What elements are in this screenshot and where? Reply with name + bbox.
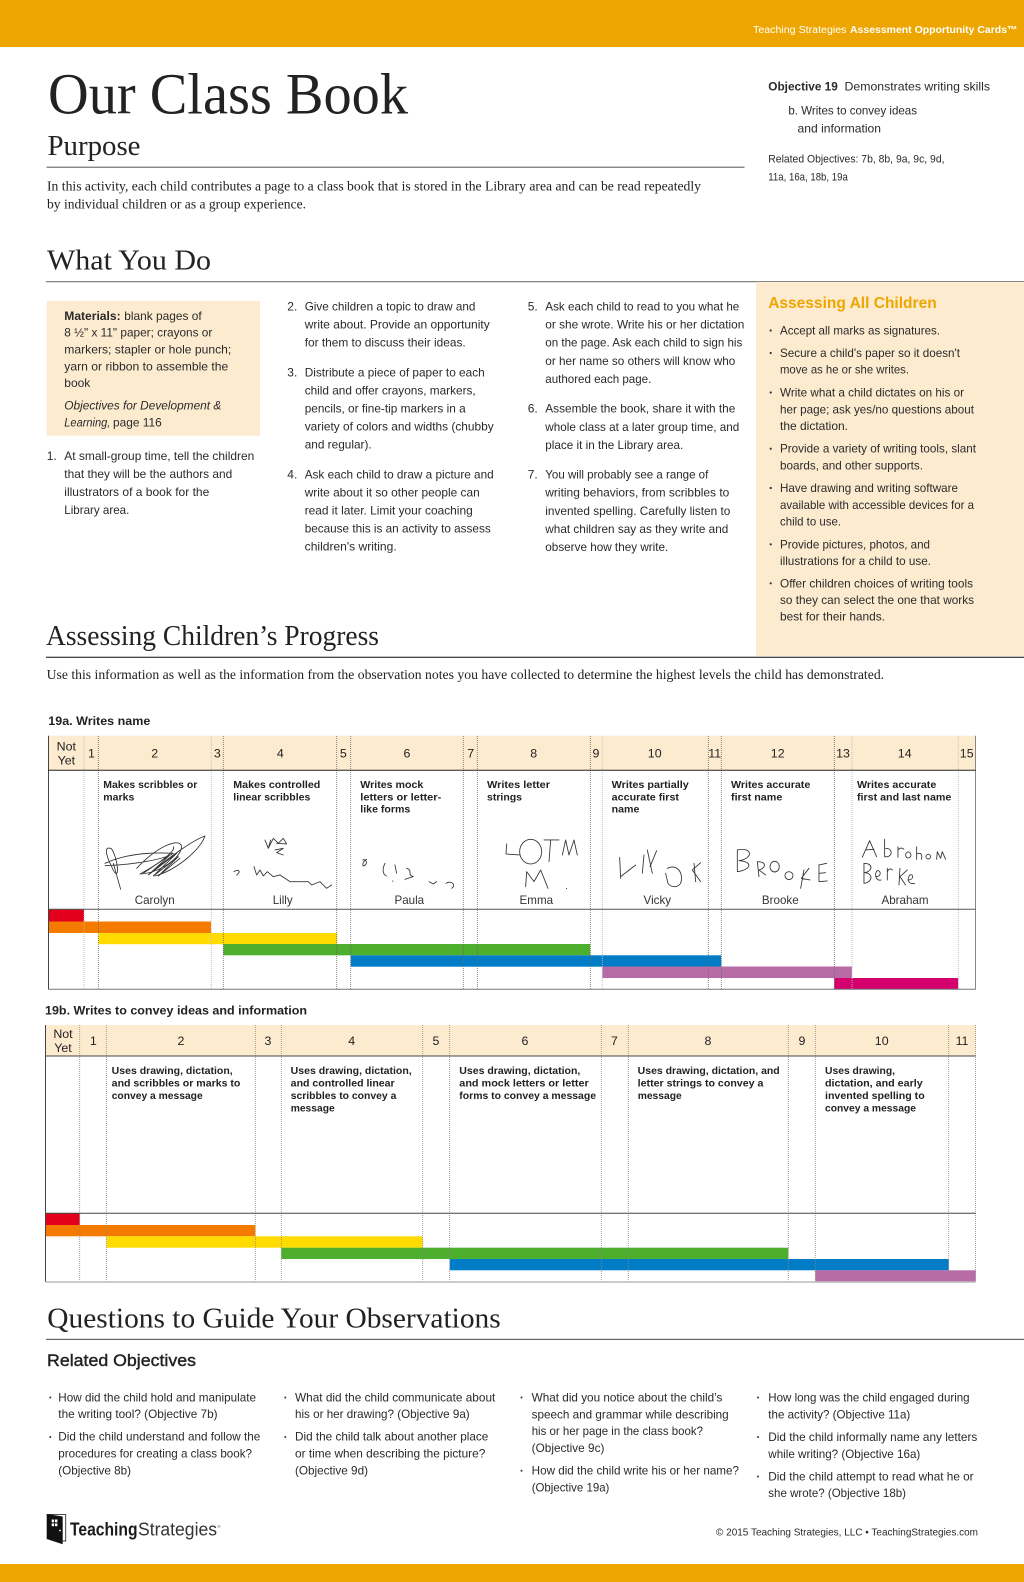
question column 2: his or her drawing? (Objective 9a) — [295, 1408, 470, 1421]
question column 1 — [49, 1391, 260, 1477]
step 7: observe how they write. — [545, 540, 668, 554]
step 2 — [287, 300, 490, 350]
step 2: for them to discuss their ideas. — [305, 336, 466, 350]
question column 4: How long was the child engaged during — [768, 1391, 970, 1404]
panel: assessing all children — [756, 282, 1024, 656]
heading: purpose: Purpose — [48, 130, 140, 162]
panel: assessing all children: Offer children choices of writing tools — [780, 577, 973, 590]
chart title: 19a: 19a. Writes name — [48, 714, 151, 728]
step 1: illustrators of a book for the — [64, 485, 210, 499]
step 5: on the page. Ask each child to sign his — [545, 336, 742, 350]
bottom banner — [0, 1564, 1024, 1582]
heading: assessing children's progress: Assessing Children’s Progress — [46, 620, 379, 652]
level descriptions: Makes controlled — [233, 780, 320, 791]
objective block: Objective 19 — [768, 80, 838, 94]
question column 4 — [757, 1391, 978, 1500]
panel: assessing all children: Assessing All Children — [768, 295, 937, 312]
level descriptions — [103, 780, 952, 816]
chart header row: 13 — [836, 746, 850, 760]
chart header row: 11 — [956, 1034, 969, 1048]
question column 4: Did the child attempt to read what he or — [768, 1470, 974, 1483]
logo: teaching strategies: Teaching — [70, 1519, 138, 1539]
step 5 — [528, 300, 744, 386]
level descriptions: letter strings to convey a — [638, 1079, 764, 1090]
step 5: Ask each child to read to you what he — [545, 300, 740, 314]
chart header row: Yet — [54, 1041, 72, 1055]
level descriptions: marks — [103, 792, 135, 803]
objective block: and information — [798, 122, 881, 136]
step 1: that they will be the authors and — [64, 467, 232, 481]
step 1 — [47, 449, 254, 517]
step 6: place it in the Library area. — [545, 438, 683, 452]
logo: teaching strategies: ® — [218, 1524, 220, 1529]
chart header row: 2 — [178, 1034, 185, 1048]
chart header row: 8 — [705, 1034, 712, 1048]
heading: what you do: What You Do — [47, 244, 211, 276]
child names: Brooke — [762, 894, 799, 907]
step 3: child and offer crayons, markers, — [305, 384, 476, 398]
question column 2: What did the child communicate about — [295, 1391, 496, 1404]
top banner: Assessment Opportunity Cards™ — [850, 25, 1018, 36]
step 4: read it later. Limit your coaching — [305, 504, 473, 518]
step 7: what children say as they write and — [544, 522, 728, 536]
copyright: © 2015 Teaching Strategies, LLC • TeachingStrategies.com — [716, 1526, 978, 1538]
step 1: At small-group time, tell the children — [64, 449, 254, 463]
level descriptions: scribbles to convey a — [291, 1091, 397, 1102]
step 2: write about. Provide an opportunity — [304, 318, 490, 332]
panel: assessing all children: available with accessible devices for a — [780, 499, 975, 512]
level descriptions: letters or letter- — [360, 792, 442, 803]
level descriptions: Makes scribbles or — [103, 780, 197, 791]
step 4: write about it so other people can — [304, 486, 480, 500]
chart header row: 4 — [348, 1034, 355, 1048]
question column 4: she wrote? (Objective 18b) — [768, 1487, 906, 1500]
chart header row: 2 — [151, 746, 158, 760]
chart header row: 12 — [771, 746, 785, 760]
assessment intro text: Use this information as well as the information from the observation notes you have collected to determine the highest levels the child has demonstrated. — [47, 668, 884, 683]
chart header row: 3 — [214, 746, 221, 760]
question column 1: (Objective 8b) — [58, 1464, 131, 1477]
panel: assessing all children: Provide a variety of writing tools, slant — [780, 443, 977, 456]
panel: materials: markers; stapler or hole punch; — [64, 342, 231, 356]
level descriptions: convey a message — [825, 1103, 916, 1114]
level descriptions: Writes mock — [360, 780, 424, 791]
level descriptions: and scribbles or marks to — [112, 1079, 240, 1090]
chart header row: 7 — [467, 746, 474, 760]
level descriptions: forms to convey a message — [459, 1091, 596, 1102]
step 7: invented spelling. Carefully listen to — [545, 504, 731, 518]
child handwriting samples, right — [506, 839, 946, 889]
panel: materials — [47, 301, 260, 436]
objective block: Demonstrates writing skills — [844, 80, 990, 94]
top banner — [0, 0, 1024, 47]
step 3: pencils, or fine-tip markers in a — [305, 402, 466, 416]
level descriptions: invented spelling to — [825, 1091, 925, 1102]
purpose text: In this activity, each child contributes a page to a class book that is stored in the Library area and can be read repeatedly — [47, 180, 701, 195]
level descriptions: and mock letters or letter — [459, 1079, 589, 1090]
purpose text — [47, 180, 701, 213]
chart header row: 7 — [611, 1034, 618, 1048]
question column 3: How did the child write his or her name? — [532, 1465, 740, 1478]
level descriptions: Uses drawing, dictation, — [112, 1066, 233, 1077]
step 3: 3. — [287, 366, 297, 380]
step 2: Give children a topic to draw and — [305, 300, 475, 314]
question column 3: his or her page in the class book? — [532, 1425, 704, 1438]
chart title: 19b: 19b. Writes to convey ideas and information — [45, 1003, 307, 1017]
step 3: variety of colors and widths (chubby — [305, 420, 494, 434]
panel: assessing all children: Provide pictures, photos, and — [780, 538, 930, 551]
chart header row: 8 — [530, 746, 537, 760]
panel: assessing all children: Secure a child's paper so it doesn't — [780, 347, 961, 360]
level descriptions: first name — [731, 792, 783, 803]
step 4: Ask each child to draw a picture and — [305, 468, 494, 482]
chart header row: 5 — [433, 1034, 440, 1048]
step 5: 5. — [528, 300, 538, 314]
panel: materials: Learning, — [64, 415, 110, 429]
objective block: Related Objectives: 7b, 8b, 9a, 9c, 9d, — [768, 153, 944, 165]
step 1: Library area. — [64, 503, 129, 517]
objective block: 11a, 16a, 18b, 19a — [768, 172, 849, 184]
panel: assessing all children: Accept all marks as signatures. — [780, 324, 940, 337]
child names: Vicky — [644, 894, 671, 907]
panel: materials: blank pages of — [124, 309, 202, 323]
panel: assessing all children: Write what a child dictates on his or — [780, 386, 964, 399]
step 7: writing behaviors, from scribbles to — [544, 486, 730, 500]
question column 3: What did you notice about the child’s — [532, 1391, 723, 1404]
level descriptions: Uses drawing, — [825, 1066, 895, 1077]
panel: assessing all children: her page; ask yes/no questions about — [780, 403, 975, 416]
step 5: or she wrote. Write his or her dictation — [545, 318, 744, 332]
question column 3: speech and grammar while describing — [532, 1408, 729, 1421]
level descriptions: first and last name — [857, 792, 952, 803]
level descriptions — [112, 1066, 925, 1114]
question column 4: while writing? (Objective 16a) — [767, 1448, 920, 1461]
child names: Carolyn — [135, 894, 175, 907]
question column 2: Did the child talk about another place — [295, 1431, 488, 1444]
step 3: and regular). — [305, 438, 372, 452]
step 4 — [287, 468, 494, 554]
chart header row — [48, 736, 976, 770]
objective block: b. Writes to convey ideas — [788, 103, 917, 117]
step 4: children's writing. — [305, 540, 397, 554]
progression chart: 19b writes to convey ideas — [45, 1025, 976, 1282]
progression bars — [45, 1214, 976, 1282]
level descriptions: Writes accurate — [857, 780, 937, 791]
question column 2: (Objective 9d) — [295, 1464, 368, 1477]
step 5: authored each page. — [545, 372, 651, 386]
chart header row: 9 — [799, 1034, 806, 1048]
child names — [135, 894, 929, 907]
child names: Paula — [394, 894, 425, 907]
chart header row — [45, 1025, 976, 1056]
panel: materials: book — [64, 376, 91, 390]
question column 1: Did the child understand and follow the — [58, 1431, 260, 1444]
objective block — [768, 80, 990, 184]
step 1: 1. — [47, 449, 57, 463]
subheading: related objectives: Related Objectives — [47, 1351, 196, 1370]
level descriptions: message — [638, 1091, 682, 1102]
step 6: whole class at a later group time, and — [544, 420, 739, 434]
logo: teaching strategies — [47, 1514, 221, 1544]
child handwriting samples, left — [105, 836, 454, 889]
chart header row: 10 — [648, 746, 662, 760]
chart header row: Not — [57, 740, 76, 754]
panel: materials: 8 ½" x 11" paper; crayons or — [64, 326, 212, 340]
chart header row: 3 — [265, 1034, 272, 1048]
chart header row: Yet — [58, 754, 76, 768]
child names: Emma — [520, 894, 554, 907]
panel: assessing all children: Have drawing and writing software — [780, 482, 958, 495]
panel: materials: page 116 — [113, 415, 162, 429]
level descriptions: strings — [487, 792, 522, 803]
level descriptions: Writes accurate — [731, 780, 811, 791]
question column 2: or time when describing the picture? — [295, 1448, 486, 1461]
chart header row: 11 — [708, 746, 721, 760]
step 3 — [287, 366, 494, 452]
level descriptions: name — [612, 805, 640, 816]
step 4: because this is an activity to assess — [305, 522, 491, 536]
chart header row: 1 — [90, 1034, 97, 1048]
question column 4: the activity? (Objective 11a) — [768, 1408, 910, 1421]
panel: materials: Materials: — [64, 309, 121, 323]
step 4: 4. — [287, 468, 297, 482]
panel: assessing all children: the dictation. — [780, 420, 848, 433]
chart header row: 6 — [522, 1034, 529, 1048]
level descriptions: like forms — [360, 805, 411, 816]
level descriptions: Uses drawing, dictation, — [291, 1066, 412, 1077]
step 5: or her name so others will know who — [545, 354, 736, 368]
question column 1: procedures for creating a class book? — [58, 1448, 253, 1461]
question column 3: (Objective 19a) — [532, 1481, 610, 1494]
level descriptions: convey a message — [112, 1091, 203, 1102]
question column 3 — [520, 1391, 740, 1494]
level descriptions: Uses drawing, dictation, and — [638, 1066, 780, 1077]
level descriptions: message — [291, 1103, 335, 1114]
panel: assessing all children: best for their hands. — [780, 611, 885, 624]
question column 2 — [284, 1391, 496, 1477]
level descriptions: and controlled linear — [291, 1079, 395, 1090]
question column 3: (Objective 9c) — [532, 1442, 605, 1455]
chart header row: Not — [53, 1027, 73, 1041]
panel: materials: Objectives for Development & — [64, 399, 221, 413]
level descriptions: dictation, and early — [825, 1079, 923, 1090]
progression bars — [48, 910, 958, 989]
panel: materials: yarn or ribbon to assemble the — [64, 359, 229, 373]
question column 1: the writing tool? (Objective 7b) — [58, 1408, 218, 1421]
step 3: Distribute a piece of paper to each — [305, 366, 485, 380]
level descriptions: linear scribbles — [233, 792, 311, 803]
child names: Abraham — [881, 894, 929, 907]
panel: assessing all children: child to use. — [780, 516, 841, 529]
heading: questions to guide your observations: Questions to Guide Your Observations — [47, 1302, 501, 1334]
step 7 — [528, 468, 731, 554]
level descriptions: accurate first — [612, 792, 680, 803]
step 7: You will probably see a range of — [545, 468, 709, 482]
level descriptions: Writes partially — [612, 780, 689, 791]
chart header row: 6 — [404, 746, 411, 760]
step 6 — [528, 402, 739, 452]
step 2: 2. — [287, 300, 297, 314]
title: Our Class Book — [48, 62, 408, 126]
panel: assessing all children: boards, and other supports. — [780, 459, 923, 472]
chart header row: 9 — [593, 746, 600, 760]
chart header row: 4 — [277, 746, 284, 760]
chart header row: 15 — [960, 746, 974, 760]
top banner: Teaching Strategies — [753, 25, 846, 36]
level descriptions: Uses drawing, dictation, — [459, 1066, 580, 1077]
icon: door — [47, 1514, 66, 1544]
chart header row: 10 — [875, 1034, 889, 1048]
panel: assessing all children: so they can select the one that works — [780, 594, 974, 607]
chart header row: 14 — [898, 746, 912, 760]
progression chart: 19a writes name — [48, 736, 976, 990]
chart header row: 1 — [88, 746, 95, 760]
logo: teaching strategies: Strategies — [138, 1519, 217, 1539]
purpose text: by individual children or as a group experience. — [47, 198, 306, 213]
child names: Lilly — [273, 894, 293, 907]
chart header row: 5 — [340, 746, 347, 760]
panel: assessing all children: illustrations for a child to use. — [780, 555, 931, 568]
level descriptions: Writes letter — [487, 780, 550, 791]
step 6: Assemble the book, share it with the — [545, 402, 736, 416]
step 6: 6. — [528, 402, 538, 416]
question column 4: Did the child informally name any letters — [768, 1431, 978, 1444]
step 7: 7. — [528, 468, 538, 482]
panel: assessing all children: move as he or she writes. — [780, 364, 909, 377]
question column 1: How did the child hold and manipulate — [58, 1391, 256, 1404]
